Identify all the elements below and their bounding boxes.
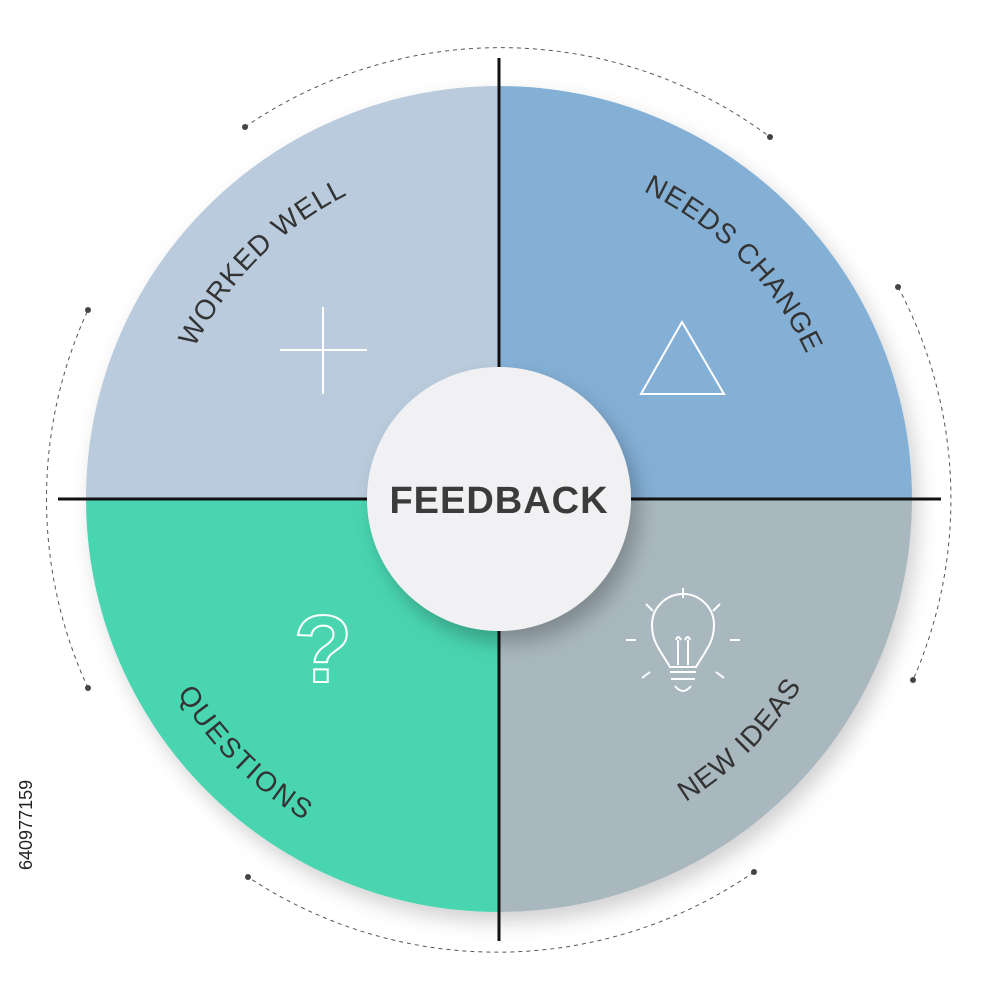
label: questions: QUESTIONS [180,687,312,818]
label: worked well: WORKED WELL [178,182,346,343]
quadrant disc [86,86,912,912]
label: needs change: NEEDS CHANGE [645,174,823,353]
quadrant: questions [86,499,499,912]
icon: triangle [641,322,724,394]
label: new ideas: NEW IDEAS [677,679,799,801]
title: feedback: FEEDBACK [389,480,609,522]
quadrant: new ideas [499,499,912,912]
quadrant: worked well [86,86,499,499]
center circle: feedback [367,367,631,631]
axis lines [58,58,941,941]
icon: lightbulb [626,588,740,691]
vertical id text: 640977159 [16,780,36,870]
quadrant: needs change [499,86,912,499]
icon: question mark: ? [294,596,352,703]
icon: plus [280,307,367,394]
